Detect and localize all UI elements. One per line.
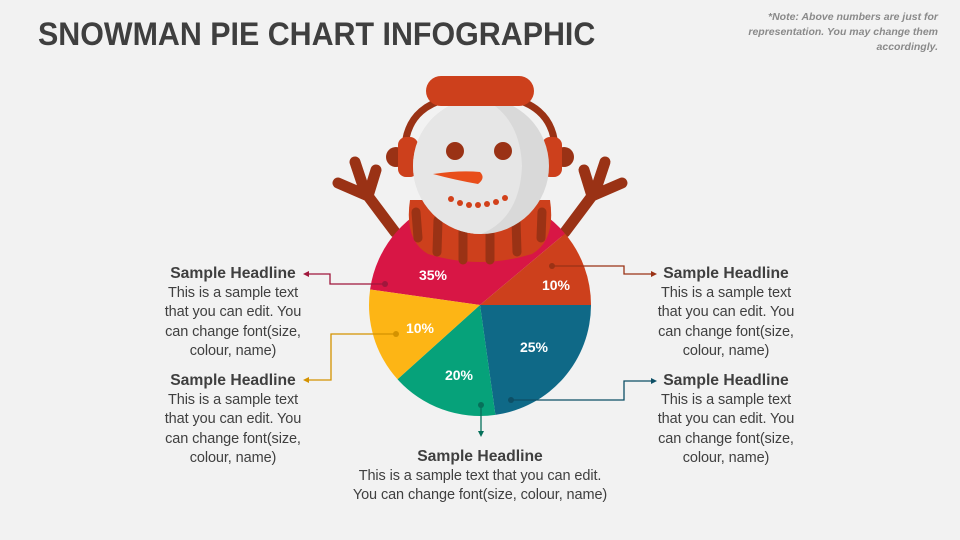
percentage labels: 25% <box>520 339 549 355</box>
pie slices <box>369 194 591 416</box>
text: left top: This is a sample text <box>168 285 298 301</box>
text: left bottom: Sample Headline <box>170 372 296 389</box>
percentage labels: 20% <box>445 367 474 383</box>
text: left bottom: This is a sample text <box>168 392 298 408</box>
text: right bottom: that you can edit. You <box>658 411 794 427</box>
headband bar <box>426 76 534 106</box>
text: right bottom: Sample Headline <box>663 372 789 389</box>
text: left bottom <box>164 372 301 466</box>
note: *Note: Above numbers are just for representation. You may change them accordingly. <box>748 11 938 53</box>
headband and earmuffs <box>386 95 574 177</box>
text: right bottom <box>658 372 794 466</box>
text: left top: Sample Headline <box>170 265 296 282</box>
percentage labels: 10% <box>542 277 571 293</box>
text: right top: that you can edit. You <box>658 304 794 320</box>
text: right bottom: colour, name) <box>683 450 769 466</box>
text: bottom: This is a sample text that you can edit. <box>359 468 601 484</box>
text: bottom: You can change font(size, colour, name) <box>353 487 607 503</box>
percentage labels: 35% <box>419 267 448 283</box>
text: left top: colour, name) <box>190 343 276 359</box>
text: right bottom: This is a sample text <box>661 392 791 408</box>
arms <box>338 162 622 232</box>
title: SNOWMAN PIE CHART INFOGRAPHIC <box>38 16 595 52</box>
text: left top: can change font(size, <box>165 324 301 340</box>
percentage labels: 10% <box>406 320 435 336</box>
text: left bottom: that you can edit. You <box>165 411 301 427</box>
text: right top: This is a sample text <box>661 285 791 301</box>
head <box>413 98 549 234</box>
text: left bottom: can change font(size, <box>165 431 301 447</box>
text: right bottom: can change font(size, <box>658 431 794 447</box>
text: left top: that you can edit. You <box>165 304 301 320</box>
text: right top: colour, name) <box>683 343 769 359</box>
text: left top <box>164 265 301 359</box>
text: right top: can change font(size, <box>658 324 794 340</box>
text: right top: Sample Headline <box>663 265 789 282</box>
text: bottom <box>353 448 607 503</box>
text: left bottom: colour, name) <box>190 450 276 466</box>
connectors <box>308 266 652 432</box>
scarf <box>409 200 551 262</box>
text: bottom: Sample Headline <box>417 448 543 465</box>
percentage labels <box>406 267 571 383</box>
text: right top <box>658 265 794 359</box>
